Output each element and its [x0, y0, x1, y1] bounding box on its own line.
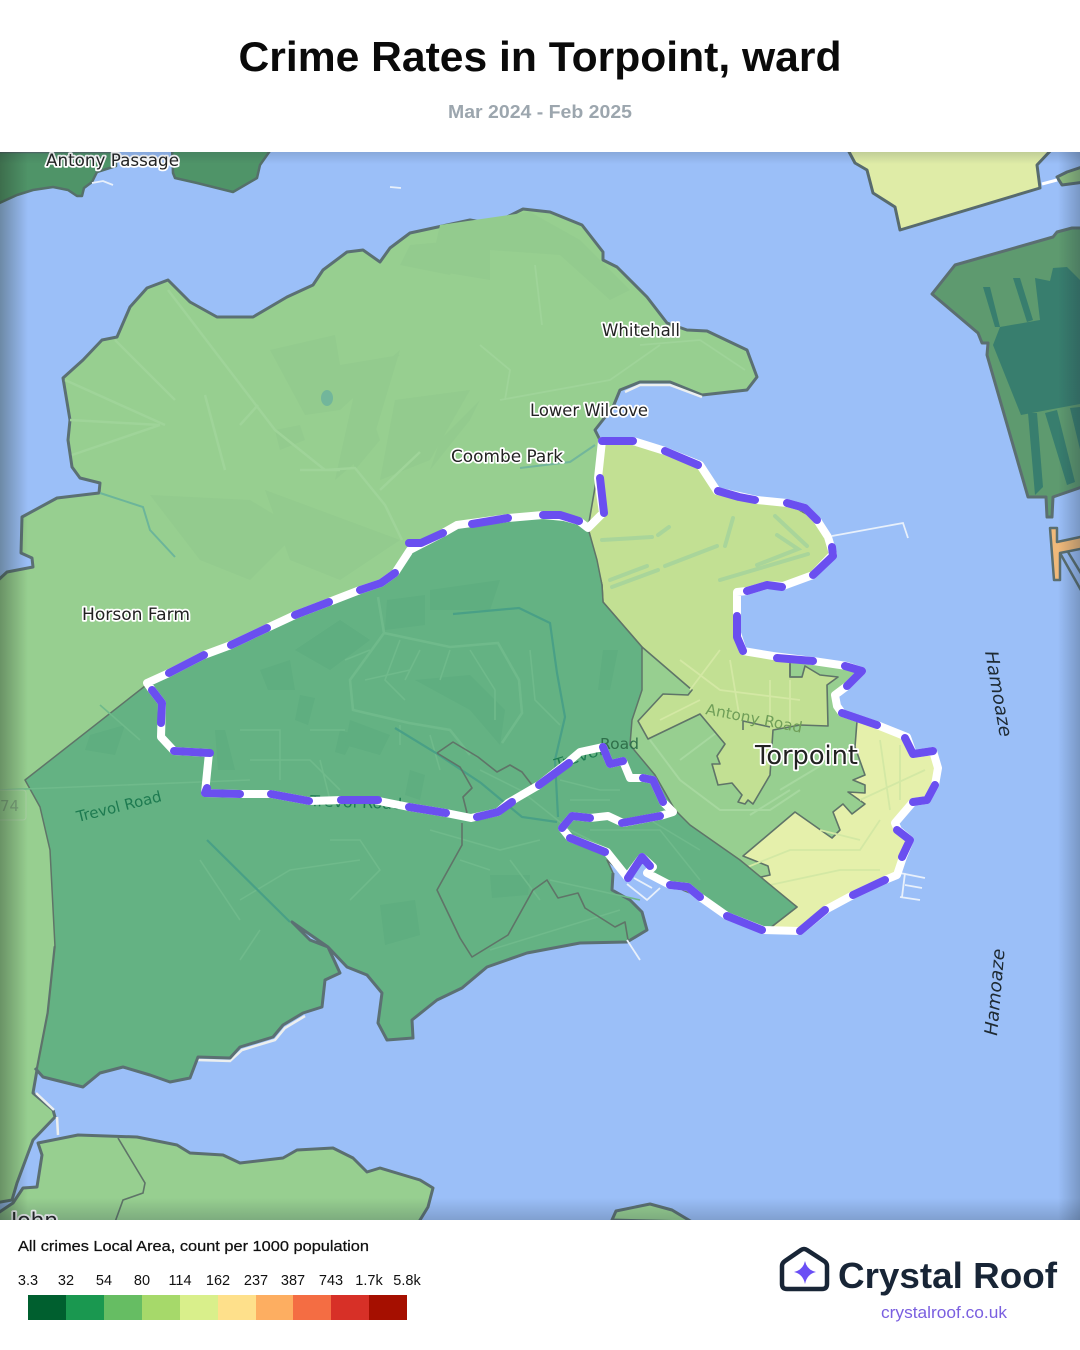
legend tick labels: 743 — [319, 1273, 343, 1289]
title: Crime Rates in Torpoint, ward — [238, 33, 842, 80]
legend tick labels: 80 — [134, 1273, 150, 1289]
ward boundary: purple dashes — [152, 441, 935, 931]
golf fairways — [602, 516, 808, 587]
place label: Whitehall: Whitehall — [602, 321, 680, 341]
place label: Antony Passage: Antony Passage — [46, 151, 179, 171]
ward boundary: white casing — [147, 441, 938, 931]
place label: John: John — [9, 1208, 58, 1232]
subtitle: date range: Mar 2024 - Feb 2025 — [448, 102, 632, 122]
place label: Torpoint: Torpoint — [754, 741, 858, 771]
land: northern shore pale area — [847, 148, 1053, 230]
logo wordmark: Crystal Roof — [838, 1255, 1058, 1296]
internal area boundaries — [437, 664, 802, 957]
land: Antony Passage north shore — [0, 148, 272, 205]
place label: Coombe Park: Coombe Park — [451, 447, 563, 467]
water label: Hamoaze south: Hamoaze — [981, 948, 1010, 1036]
road shield A374: 74 — [0, 797, 19, 815]
palest zone — [743, 721, 938, 931]
darker fields in the ward — [85, 580, 618, 945]
road label: Trevol Road east: Trevol — [551, 743, 605, 773]
water — [0, 152, 1080, 1220]
legend tick labels: 3.3 — [18, 1273, 38, 1289]
ward boundary — [147, 441, 938, 931]
legend tick labels: 54 — [96, 1273, 112, 1289]
stream: north-west — [100, 493, 175, 557]
land: south shore — [0, 1135, 692, 1225]
east silhouette: light green — [631, 648, 864, 876]
road label: Trevol Road west: Trevol Road — [74, 787, 163, 826]
map vignette — [0, 152, 1080, 1220]
dockyard — [932, 228, 1080, 517]
road label: Road: Road — [600, 735, 639, 753]
streets in light green zone — [650, 730, 850, 815]
legend tick labels: 5.8k — [393, 1273, 421, 1289]
main high-density zone: Torpoint ward west and Antony — [25, 515, 797, 1087]
piers and marina — [92, 181, 925, 960]
road label: Antony Road: Antony Road — [704, 700, 804, 737]
land: north-east spit — [1057, 166, 1080, 185]
land: west and north low-crime area — [0, 209, 757, 1203]
icon: house with star — [782, 1249, 827, 1289]
legend — [18, 1238, 421, 1320]
place label: Horson Farm: Horson Farm — [82, 605, 190, 625]
legend tick labels — [18, 1273, 421, 1289]
legend colour scale — [28, 1295, 407, 1320]
stream: Coombe Park — [520, 445, 595, 468]
logo: Crystal Roof — [782, 1249, 1058, 1322]
ferry link — [1042, 180, 1057, 184]
legend tick labels: 32 — [58, 1273, 74, 1289]
streams in the ward — [207, 608, 565, 922]
yellow-green zone — [588, 441, 838, 804]
legend tick labels: 387 — [281, 1273, 305, 1289]
legend tick labels: 162 — [206, 1273, 230, 1289]
legend tick labels: 237 — [244, 1273, 268, 1289]
water label: Hamoaze north: Hamoaze — [980, 649, 1016, 739]
jetty: orange zone — [1050, 528, 1080, 592]
road label: Trevol Road middle: Trevol Road — [309, 792, 402, 813]
legend tick labels: 1.7k — [355, 1273, 383, 1289]
website: crystalroof.co.uk — [881, 1304, 1008, 1322]
streets in yellow zones — [660, 650, 925, 885]
pond — [321, 390, 333, 406]
legend title: All crimes Local Area, count per 1000 population — [18, 1238, 369, 1255]
beach strips — [36, 385, 702, 1135]
road shield A374 — [0, 790, 26, 820]
coastline: south-west — [35, 873, 647, 1087]
street network — [0, 597, 700, 960]
fields and tracks on west land — [64, 214, 745, 540]
place label: Lower Wilcove: Lower Wilcove — [530, 401, 648, 421]
legend tick labels: 114 — [168, 1273, 192, 1289]
